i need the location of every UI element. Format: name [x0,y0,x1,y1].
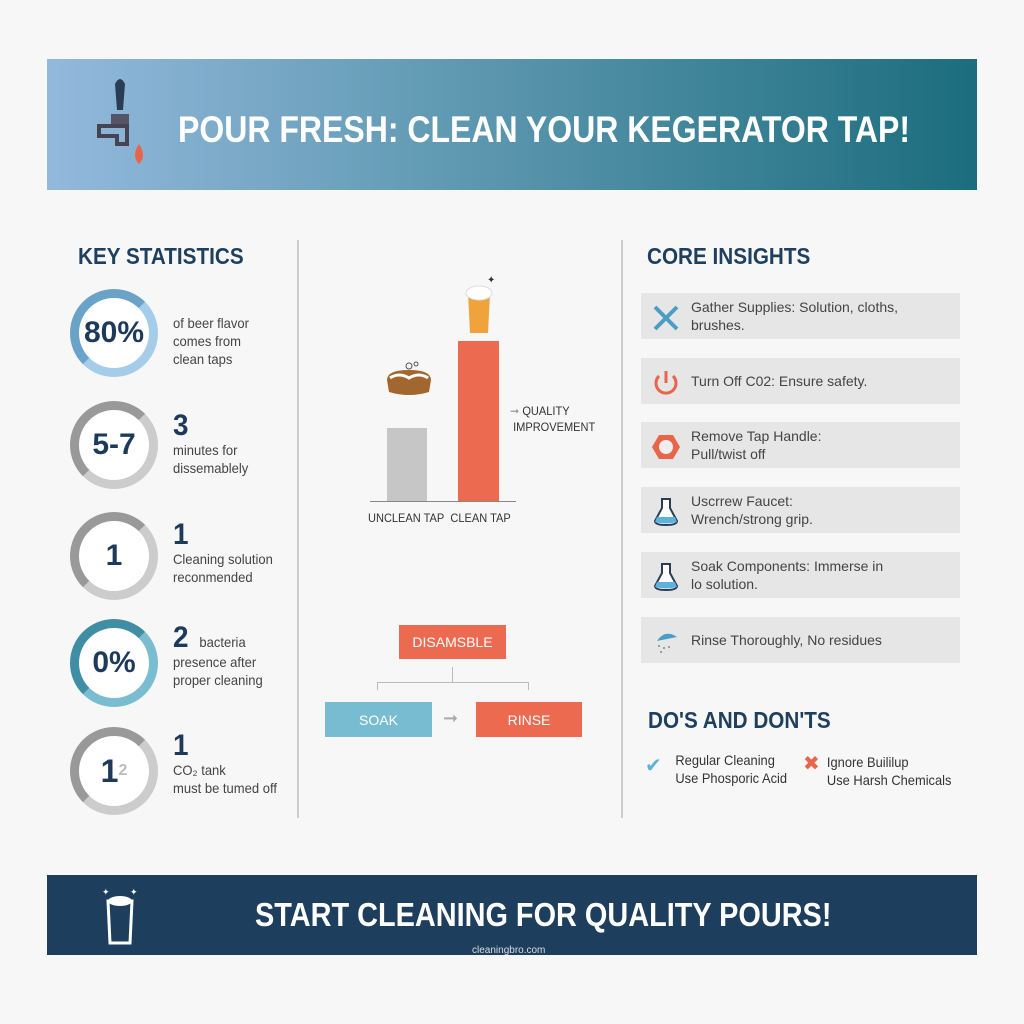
stat 2 [70,401,248,489]
card 4 [641,487,960,533]
step: disassemble [399,625,506,659]
dont list: Ignore Buililup [827,754,909,770]
stat 3: reconmended [173,569,253,585]
stat 5: must be tumed off [173,780,277,796]
heading: DO'S AND DON'TS [648,707,831,733]
icon: dirty sponge [387,362,431,395]
card 5 [641,552,960,598]
card 4: Uscrrew Faucet: [691,493,793,509]
footer text: START CLEANING FOR QUALITY POURS! [255,896,831,933]
label: quality improvement [510,404,595,434]
stat 5: CO₂ tank [173,762,226,778]
do list: Regular Cleaning [675,752,775,768]
dont list: ✖ [803,753,820,775]
do list: Use Phosporic Acid [675,770,787,786]
icon: beer glass: ✦ [102,887,110,897]
step: rinse: RINSE [508,712,550,728]
bar: unclean tap [387,428,427,501]
stat 1: comes from [173,333,241,349]
heading: CORE INSIGHTS [647,243,810,269]
stat 3: 1 [106,539,122,572]
stat 4: proper cleaning [173,672,263,688]
step: soak [325,702,432,737]
bar: clean tap [458,341,499,501]
step: rinse [476,702,582,737]
do list: ✔ [645,755,662,777]
icon: beer tap [97,79,143,164]
stat 1: of beer flavor [173,315,249,331]
stat 2: minutes for [173,442,237,458]
flow diagram [325,625,582,737]
icon: beer glass [466,275,495,333]
stat 5: 2 [118,762,127,779]
icon: beer glass: ✦ [487,275,495,286]
card 5: lo solution. [691,576,758,592]
step: disassemble: DISAMSBLE [412,634,493,650]
stat 3: 1 [173,518,189,551]
card 4: Wrench/strong grip. [691,511,813,527]
card 5: Soak Components: Immerse in [691,558,883,574]
card 3: Remove Tap Handle: [691,428,821,444]
stat 4: 2 bacteria [173,621,246,654]
card 3: Pull/twist off [691,446,765,462]
stat 3: Cleaning solution [173,551,273,567]
label: quality improvement: IMPROVEMENT [513,420,595,434]
stat 4: 0% [92,646,136,679]
card 2: Turn Off C02: Ensure safety. [691,373,867,389]
stat 2: dissemablely [173,460,248,476]
do list [645,752,787,786]
dont list: Use Harsh Chemicals [827,772,951,788]
stat 2: 5-7 [92,428,136,461]
stat 1: clean taps [173,351,232,367]
stat 5 [70,727,277,815]
bar chart [368,275,595,525]
stat 1: 80% [84,316,144,349]
heading: KEY STATISTICS [78,243,244,269]
header banner [47,59,977,190]
stat 2: 3 [173,409,189,442]
footer banner [47,875,977,955]
icon: beer glass [102,887,138,944]
stat 4: presence after [173,654,256,670]
bar chart: UNCLEAN TAP CLEAN TAP [368,511,511,525]
source: cleaningbro.com [472,945,545,956]
icon: beer glass: ✦ [130,887,138,897]
stat 3 [70,512,273,600]
card 6 [641,617,960,663]
stat 5: 1 [101,752,118,788]
dont list [803,753,951,788]
title: POUR FRESH: CLEAN YOUR KEGERATOR TAP! [178,109,910,150]
step: soak: SOAK [359,712,398,728]
card 1 [641,293,960,339]
card 1: Gather Supplies: Solution, cloths, [691,299,898,315]
card 2 [641,358,960,404]
stat 1 [70,289,249,377]
card 1: brushes. [691,317,745,333]
stat 5: 1 [173,729,189,762]
label: quality improvement: ➞ QUALITY [510,404,570,418]
card 3 [641,422,960,468]
arrow: ➞ [443,708,458,728]
panel: dos and donts [645,707,951,788]
stat 4 [70,619,263,707]
card 6: Rinse Thoroughly, No residues [691,632,882,648]
